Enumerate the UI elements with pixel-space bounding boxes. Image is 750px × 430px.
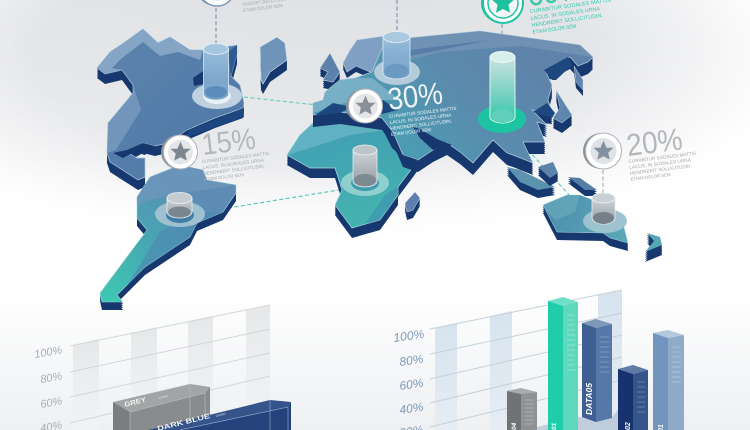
cylinder: Australia: [583, 193, 627, 233]
callout: green Asia: HENDRERIT SOLLICITUDIN.: [531, 13, 603, 29]
green data bar: [548, 297, 578, 430]
callout: 15%: ETIAM DOLOR SEM: [204, 172, 244, 182]
right bar chart: [392, 290, 684, 430]
y axis labels: [33, 344, 63, 430]
callout: 20%: ETIAM DOLOR SEM: [630, 172, 671, 182]
floor shadow: [525, 405, 622, 430]
grey bar: DATA01: [158, 394, 170, 400]
grey data bar: 04: [511, 422, 518, 430]
dark blue bar: [148, 400, 291, 430]
badge: South America star: [161, 135, 198, 169]
callout: green Asia: ETIAM DOLOR SEM: [532, 24, 577, 36]
map: South America: [100, 165, 236, 310]
dashed connector lines: [216, 0, 603, 208]
green data bar: 01: [551, 422, 558, 430]
y axis labels: 60%: [398, 376, 425, 393]
callout: 15%: 15%: [200, 123, 257, 162]
callout: 15%: HENDRERIT SOLLICITUDIN.: [203, 164, 265, 176]
callout: 20%: CURABITUR SODALES MATTIS: [628, 151, 696, 164]
grey data bar: [507, 388, 537, 430]
map: Greenland and islands: [260, 37, 597, 220]
callout: top left text: ETIAM DOLOR SEM: [243, 3, 283, 13]
badge: Australia star: [583, 133, 622, 169]
callout: 15%: LACUS. IN SODALES URNA: [202, 157, 265, 170]
cylinder: Europe: [374, 32, 420, 85]
y axis labels: 80%: [398, 352, 425, 369]
light blue data bar: [653, 330, 684, 430]
callout: 20%: 20%: [624, 121, 684, 163]
callout: 30%: 30%: [386, 75, 445, 117]
y axis labels: 100%: [33, 344, 63, 361]
DATA05 bar: DATA05: [585, 382, 594, 415]
callout: 20%: [624, 120, 699, 182]
map: Africa: [287, 122, 418, 238]
callout: 30%: [385, 74, 459, 137]
dark blue bar: DATA02: [215, 412, 227, 418]
badge: Asia star: [481, 0, 523, 23]
y axis labels: 60%: [39, 395, 63, 411]
callout: green Asia: LACUS. IN SODALES URNA: [530, 6, 601, 22]
map: Eurasia: [313, 31, 593, 175]
navy data bar: [618, 365, 648, 430]
grey bar: [113, 384, 210, 430]
cylinder: Asia: [478, 52, 526, 133]
grey bar: GREY: [124, 397, 147, 409]
callout: 30%: LACUS. IN SODALES URNA: [389, 112, 452, 125]
y axis labels: 40%: [398, 400, 425, 417]
callout: 15%: [198, 121, 272, 182]
callout: 30%: ETIAM DOLOR SEM: [391, 127, 431, 137]
y axis labels: 80%: [39, 370, 63, 386]
chart stripes: [435, 290, 622, 430]
chart stripes: [73, 305, 270, 430]
callout: 20%: HENDRERIT SOLLICITUDIN.: [630, 163, 692, 176]
cylinder: North America: [192, 44, 242, 109]
map: Australia: [543, 195, 662, 262]
badge: North America star: [197, 0, 235, 6]
cylinder: South America: [155, 192, 205, 227]
DATA05 bar: [582, 319, 612, 422]
callout: 30%: HENDRERIT SOLLICITUDIN.: [390, 118, 452, 131]
y axis labels: [392, 327, 425, 430]
cylinder: Africa: [341, 145, 389, 196]
navy data bar: 02: [625, 422, 632, 430]
callout: 30%: CURABITUR SODALES MATTIS: [389, 106, 457, 119]
left bar chart: [33, 305, 291, 430]
map: North America: [97, 29, 244, 190]
callout: green Asia: [525, 0, 615, 36]
y axis labels: 100%: [392, 327, 425, 345]
callout: 15%: CURABITUR SODALES MATTIS: [202, 151, 270, 164]
badge: Europe star: [346, 89, 382, 123]
callout: 20%: LACUS. IN SODALES URNA: [629, 157, 692, 170]
